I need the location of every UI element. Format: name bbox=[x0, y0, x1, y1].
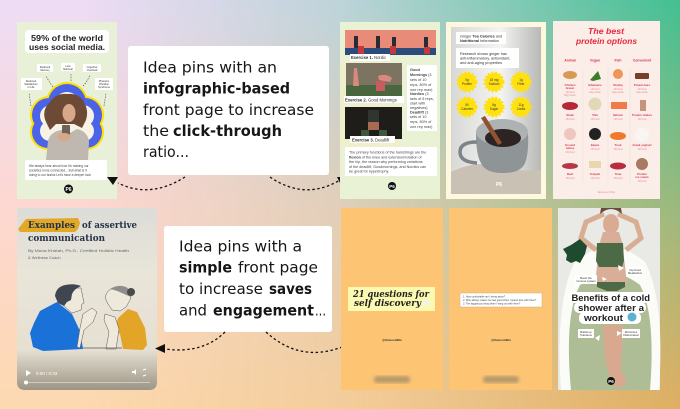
labels: nutrition values: 11g bbox=[518, 103, 524, 107]
text block: sets and reps: reps, 80% of bbox=[410, 120, 432, 124]
text block: ginger research: and anti-aging properties bbox=[460, 61, 502, 65]
callout: simple front page: engagement bbox=[213, 302, 315, 320]
icons: nutrition badges bbox=[458, 73, 530, 116]
image: Good Mornings exercise bbox=[346, 63, 402, 96]
labels: effects of social media: Overload bbox=[87, 68, 98, 72]
food labels: Tempeh bbox=[590, 172, 601, 176]
food labels: Protein shakes bbox=[632, 113, 652, 117]
icons: white pointer arrows bbox=[595, 265, 624, 341]
food labels: Protein bbox=[637, 172, 647, 176]
arrow: to social media pin bbox=[107, 177, 185, 190]
labels: nutrition values: Fiber bbox=[517, 82, 526, 86]
heading: Examples of assertive communication: Examples bbox=[28, 220, 75, 231]
text block: sets and reps bbox=[407, 65, 437, 131]
food labels: Beans bbox=[591, 143, 600, 147]
text block: sets and reps: Good bbox=[410, 68, 421, 72]
food grid: 100 kcal bbox=[614, 118, 623, 121]
labels: effects of social media: Memory bbox=[40, 68, 50, 72]
labels: effects of social media: Cognitive bbox=[87, 65, 98, 69]
panel: exercise infographic pin bbox=[340, 22, 440, 199]
food grid: 100 kcal bbox=[614, 148, 623, 151]
callout: simple front page: front page bbox=[238, 258, 318, 276]
food grid: 100 kcal bbox=[566, 118, 575, 121]
text block: sets and reps: Mornings (3 bbox=[410, 73, 432, 77]
food grid: 20g protein bbox=[612, 91, 625, 94]
label: handle: @theworldlife bbox=[491, 338, 511, 342]
labels: benefits: Metabolism bbox=[628, 271, 643, 275]
labels: nutrition values: 1g bbox=[519, 78, 523, 82]
text block: ginger tea title bbox=[456, 32, 506, 44]
labels: effects of social media: Reduced bbox=[26, 79, 37, 83]
image: Nordic exercise bbox=[345, 30, 436, 55]
labels: nutrition values: 18 mg bbox=[490, 78, 499, 82]
label: Exercise 1: Exercise 1. Nordic bbox=[351, 55, 386, 60]
column headings: Animal bbox=[564, 58, 576, 62]
labels: benefits: Builds up bbox=[580, 330, 592, 334]
heading: 59% of the world: 59% of the world bbox=[31, 34, 103, 43]
text block: intro bbox=[25, 160, 107, 180]
text block: author: & Wellness Coach bbox=[28, 255, 61, 260]
panel: questions list pin bbox=[449, 208, 552, 390]
labels: effects of social media: Syndrome bbox=[98, 85, 110, 89]
heading: Examples of assertive communication: communication bbox=[28, 233, 105, 244]
callout: infographic-based front page: ratio... bbox=[143, 143, 189, 161]
icon: logo badge: P6 bbox=[608, 379, 614, 384]
panel: ginger tea pin bbox=[446, 22, 546, 199]
text block: author bbox=[28, 248, 129, 260]
arrow: to video pin bbox=[155, 332, 225, 353]
food grid: 100 kcal bbox=[638, 148, 647, 151]
heading: The best protein options bbox=[575, 26, 637, 46]
text block: question list: 3. The biggest joy bring when I hang out with them? bbox=[463, 302, 521, 306]
food grid: 10g protein bbox=[636, 91, 649, 94]
text block: sets and reps: reps, 80% of bbox=[410, 83, 432, 87]
text block: hamstring functions bbox=[345, 147, 437, 176]
arrow: to question pin bbox=[266, 332, 354, 352]
column headings bbox=[564, 58, 652, 62]
labels: nutrition values: Sugar bbox=[490, 107, 499, 111]
heading: benefits of a cold shower: Benefits of a cold bbox=[572, 293, 650, 304]
panel: self discovery pin bbox=[341, 208, 443, 390]
icon: logo badge: P6 bbox=[65, 187, 72, 193]
blurred footer bbox=[374, 376, 410, 383]
video controls: 0:00 / 0:33 bbox=[36, 371, 58, 376]
labels: effects of social media: Vibration bbox=[99, 82, 110, 86]
labels: nutrition values: Carbs bbox=[517, 107, 526, 111]
heading: Examples of assertive communication: of assertive bbox=[82, 220, 137, 231]
text block: question list bbox=[460, 293, 542, 307]
labels: nutrition values: Calories bbox=[461, 107, 473, 111]
labels: effects of social media: Phantom bbox=[99, 79, 109, 83]
callout: simple front page: and bbox=[179, 302, 207, 320]
video controls bbox=[24, 369, 150, 384]
callout: simple front page: simple bbox=[179, 258, 232, 276]
labels: benefits: immune system bbox=[576, 279, 596, 283]
highlight: Examples bbox=[18, 218, 80, 232]
text block: question list: 2. Who always makes me feel good when I spend time with them? bbox=[463, 299, 537, 302]
food labels: Chicken bbox=[565, 83, 576, 87]
arrows: dashed label links bbox=[29, 73, 106, 106]
food labels: Protein bars bbox=[634, 83, 651, 87]
food labels bbox=[565, 83, 652, 179]
food labels: Beef bbox=[567, 172, 573, 176]
text block: sets and reps: one rep max) bbox=[410, 88, 433, 92]
food labels: Ground bbox=[565, 143, 575, 147]
callout: simple front page: ... bbox=[315, 302, 326, 320]
label: Exercise 3: Exercise 3. Deadlift bbox=[352, 138, 390, 142]
heading: 59% of the world bbox=[25, 30, 109, 53]
text block: intro: doing to our brains Let's have a deeper look bbox=[29, 173, 91, 177]
image: mug photo bbox=[451, 27, 541, 194]
text block: sets and reps: start with bbox=[410, 102, 425, 106]
text block: sets and reps: Nordics (3 bbox=[410, 92, 429, 96]
food labels: Trout bbox=[614, 143, 622, 147]
callout: simple front page: to increase bbox=[179, 280, 263, 298]
label: Exercise 1 bbox=[350, 54, 390, 61]
callout: infographic-based front page: infographic-based bbox=[143, 80, 290, 98]
icon: logo badge bbox=[607, 377, 615, 385]
arrow: to exercise pin bbox=[270, 177, 348, 190]
food labels: Shrimp bbox=[613, 83, 623, 87]
food labels: Greek yoghurt bbox=[632, 143, 652, 147]
labels: benefits: Improved bbox=[629, 268, 641, 272]
food grid: 100 kcal bbox=[591, 177, 600, 180]
callout: infographic-based front page: Idea pins with an bbox=[143, 58, 277, 76]
food labels: ice cream bbox=[636, 175, 649, 179]
callout: infographic-based front page: front page to increase bbox=[143, 101, 314, 119]
text block: hamstring functions: The primary functions of the hamstrings are the bbox=[349, 150, 426, 154]
callout: infographic-based front page: click-through bbox=[173, 122, 282, 140]
food labels: Steak bbox=[566, 113, 574, 117]
column headings: Fish bbox=[615, 58, 621, 62]
heading: benefits of a cold shower: shower after a bbox=[578, 303, 645, 314]
food labels: Edamame bbox=[588, 83, 602, 87]
labels: effects of social media: Reduced bbox=[40, 65, 51, 69]
food grid: 100 kcal bbox=[638, 180, 647, 183]
labels: effects of social media: Satisfaction bbox=[24, 82, 38, 86]
food grid: 100 kcal bbox=[566, 151, 575, 154]
food grid: 20g protein bbox=[564, 94, 577, 97]
callout: simple front page bbox=[164, 226, 332, 332]
text block: question list: 1. How comfortable am I being alone? bbox=[463, 296, 506, 298]
text block: hamstring functions: of the deadlift, Goodmornings, and Nordics can bbox=[349, 165, 426, 169]
text block: sets and reps: sets of 5 reps, bbox=[410, 97, 434, 101]
callout: simple front page: saves bbox=[269, 280, 312, 298]
column headings: Vegan bbox=[590, 58, 600, 62]
heading: 21 questions for self discovery bbox=[348, 287, 435, 311]
labels: benefits bbox=[575, 267, 643, 338]
text block: ginger research bbox=[456, 48, 519, 68]
food labels: Salmon bbox=[613, 113, 623, 117]
icon: flower frame with portrait bbox=[30, 82, 104, 160]
labels: nutrition values: 8g bbox=[492, 103, 496, 107]
panel: cold shower pin bbox=[558, 208, 660, 390]
callout: simple front page: Idea pins with a bbox=[179, 238, 302, 256]
label: Exercise 2 bbox=[344, 96, 404, 103]
text block: hamstring functions: the hip, the reason why performing variations bbox=[349, 160, 423, 164]
image: bath bbox=[560, 208, 660, 390]
labels: benefits: Boost the bbox=[580, 276, 592, 280]
column headings: Convenient bbox=[633, 58, 652, 62]
text block: sets and reps: sets of 10 bbox=[410, 115, 426, 119]
blurred footer bbox=[483, 376, 519, 383]
heading: Examples of assertive communication bbox=[28, 220, 137, 244]
food labels: Tofu bbox=[592, 113, 598, 117]
heading: The best protein options: protein options bbox=[575, 36, 637, 46]
labels: nutrition values: Sodium bbox=[489, 82, 500, 86]
heading: benefits of a cold shower bbox=[568, 292, 653, 324]
panel: assertive communication video pin bbox=[17, 208, 157, 390]
text block: sets and reps: sets of 10 bbox=[410, 78, 426, 82]
panel: protein options pin bbox=[553, 21, 660, 199]
food grid: 100 kcal bbox=[638, 88, 647, 91]
image: Deadlift exercise bbox=[345, 107, 402, 139]
text block: intro: We always hear about how it's making our bbox=[29, 164, 89, 168]
labels: benefits: Minimizes bbox=[625, 330, 638, 334]
food grid: 100 kcal bbox=[591, 88, 600, 91]
labels: effects of social media: in Life bbox=[28, 85, 35, 89]
labels: benefits: Tolerance bbox=[580, 333, 593, 337]
labels: nutrition values: 0g bbox=[465, 78, 469, 82]
text block: ginger research: Research shows ginger has bbox=[460, 52, 507, 56]
food grid: 100 kcal bbox=[614, 88, 623, 91]
heading: 21 questions for self discovery: self discovery bbox=[354, 299, 422, 309]
labels: effects of social media: Rational bbox=[63, 67, 73, 71]
callout: infographic-based front page bbox=[128, 46, 329, 175]
food labels: turkey bbox=[566, 146, 575, 150]
food grid: 100 kcal bbox=[566, 177, 575, 180]
heading: 21 questions for self discovery: 21 questions for bbox=[352, 290, 430, 300]
food grid: 100 kcal bbox=[638, 118, 647, 121]
food labels: Tuna bbox=[615, 172, 622, 176]
labels: effects of social media: Less bbox=[65, 64, 71, 68]
label: handle: @theworldlife bbox=[382, 338, 402, 342]
text block: ginger research: anti-inflammatory, antioxidant, bbox=[460, 56, 510, 60]
text block: ginger tea title: Nutritional Information bbox=[460, 39, 499, 43]
food labels: breast bbox=[566, 86, 574, 90]
illustration: couple talking bbox=[30, 284, 147, 351]
food grid bbox=[562, 68, 652, 194]
text block: intro: societies more connected... But what is it bbox=[29, 168, 87, 172]
panel: social media infographic pin bbox=[17, 22, 117, 199]
heading: 59% of the world: uses social media. bbox=[29, 43, 105, 52]
icon: logo badge: P6 bbox=[389, 184, 395, 189]
heading: benefits of a cold shower: workout bbox=[583, 313, 624, 324]
callout: infographic-based front page: the bbox=[143, 122, 169, 140]
icon: logo badge bbox=[388, 182, 396, 190]
label: Exercise 2: Exercise 2. Good Mornings bbox=[345, 98, 397, 102]
food grid: 100 kcal bbox=[591, 148, 600, 151]
heading: The best protein options: The best bbox=[588, 26, 625, 36]
labels: nutrition values bbox=[461, 78, 526, 111]
labels: benefits: Inflammation bbox=[623, 333, 639, 337]
icon: logo badge bbox=[64, 184, 73, 194]
text block: sets and reps: Deadlift (3 bbox=[410, 110, 428, 114]
labels: nutrition values: Protein bbox=[462, 82, 472, 86]
food grid: 100 kcal bbox=[566, 91, 575, 94]
icon: logo: P6 bbox=[496, 182, 502, 188]
labels: nutrition values: 50 bbox=[465, 103, 469, 107]
food grid: Values per 100g bbox=[597, 191, 615, 194]
text block: sets and reps: one rep max) bbox=[410, 125, 433, 129]
food grid: 100 kcal bbox=[614, 177, 623, 180]
text block: ginger tea title: Ginger Tea Calories and bbox=[460, 34, 502, 38]
text block: author: By Mona Khiriah, Ph.D., Certified Holistic Health bbox=[28, 248, 129, 253]
text block: sets and reps: negatives) bbox=[410, 106, 428, 110]
labels: effects of social media bbox=[21, 63, 113, 90]
text block: hamstring functions: be great for hypertrophy. bbox=[349, 170, 389, 174]
text block: hamstring functions: flexion of the knee and extension/rotation of bbox=[349, 156, 423, 160]
food grid: 10g protein bbox=[589, 91, 602, 94]
label: Exercise 3 bbox=[350, 136, 395, 143]
food grid: 100 kcal bbox=[591, 118, 600, 121]
